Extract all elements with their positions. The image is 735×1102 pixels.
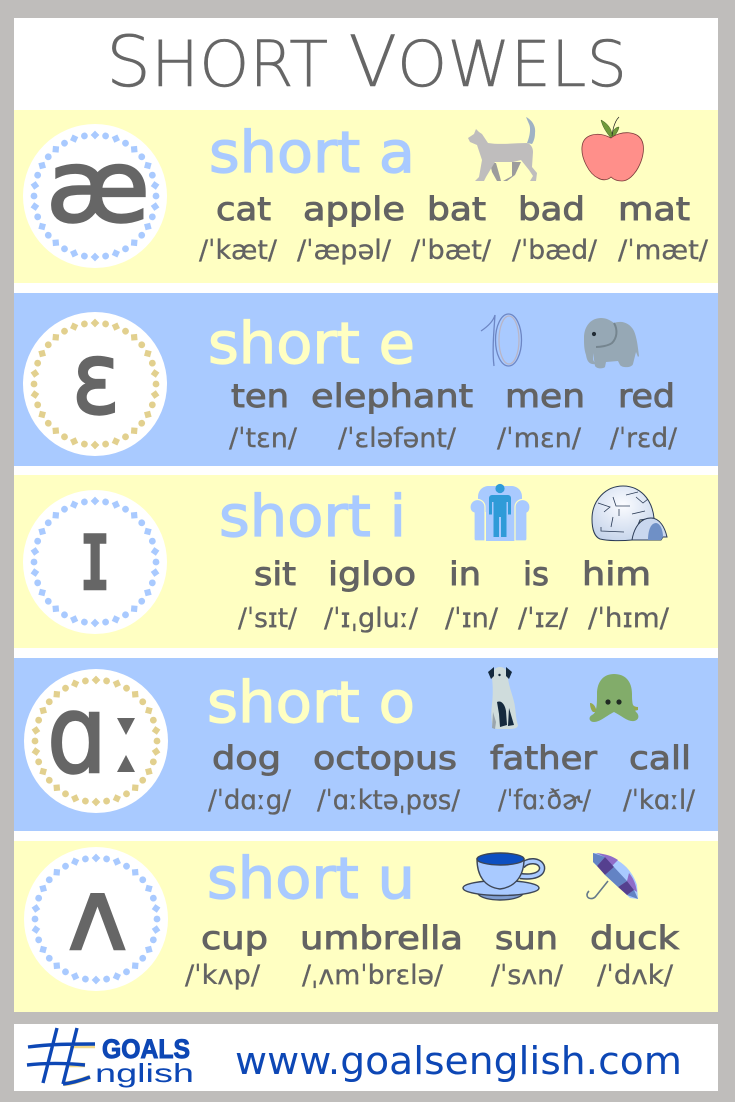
phonetics: short i: /ˈɪˌgluː/ — [324, 603, 419, 634]
phonetics: short e — [229, 423, 678, 454]
heading: short e: short e — [208, 311, 415, 377]
icon: dog — [488, 667, 518, 729]
phonetics: short a: /ˈkæt/ — [199, 235, 278, 266]
phonetics: short o — [208, 785, 696, 816]
phonetics: short a — [199, 235, 709, 266]
words: short o — [212, 739, 691, 777]
words: short o: octopus — [313, 739, 457, 777]
vowel badge: epsilon: ɛ — [72, 320, 120, 437]
words: short i: sit — [254, 555, 296, 593]
heading: short o: short o — [207, 670, 415, 736]
logo: goals english: nglish — [95, 1058, 194, 1088]
words: short e: elephant — [311, 377, 473, 415]
vowel badge: small capital I: ɪ — [80, 496, 110, 613]
footer — [14, 1024, 718, 1091]
vowel badge: small capital I — [23, 490, 167, 634]
panel: short o — [14, 658, 718, 831]
words: short a: cat — [216, 190, 271, 228]
phonetics: short u: /ˈdʌk/ — [597, 960, 674, 991]
words: short a: apple — [303, 190, 405, 228]
phonetics: short e: /ˈrɛd/ — [610, 423, 678, 454]
words: short i: igloo — [328, 555, 416, 593]
words: short e: ten — [231, 377, 289, 415]
phonetics: short e: /ˈtɛn/ — [229, 423, 298, 454]
phonetics: short u: /ˌʌmˈbrɛlə/ — [302, 960, 444, 991]
icon: cat — [468, 117, 537, 181]
words: short a — [216, 190, 690, 228]
heading: short u: short u — [207, 846, 415, 912]
phonetics: short i — [238, 603, 670, 634]
phonetics: short i: /ˈɪz/ — [518, 603, 569, 634]
phonetics: short o: /ˈkɑːl/ — [623, 785, 696, 816]
words: short i — [254, 555, 651, 593]
words: short a: bat — [427, 190, 486, 228]
words: short i: him — [582, 555, 651, 593]
panel: short e — [14, 293, 718, 466]
icon: igloo — [592, 486, 667, 541]
words: short u: sun — [495, 919, 558, 957]
icon: umbrella — [587, 853, 638, 899]
title: SHORT VOWELS — [106, 21, 627, 103]
words: short o: father — [490, 739, 598, 777]
words: short u — [201, 919, 680, 957]
vowel badge: epsilon — [23, 312, 167, 456]
phonetics: short o: /ˈɑːktəˌpʊs/ — [317, 785, 461, 816]
panel: short i — [14, 475, 718, 648]
words: short u: duck — [590, 919, 680, 957]
words: short o: call — [629, 739, 691, 777]
phonetics: short o: /ˈdɑːg/ — [208, 785, 292, 816]
words: short i: in — [449, 555, 481, 593]
vowel badge: caret — [24, 847, 168, 991]
phonetics: short u: /ˈkʌp/ — [185, 960, 261, 991]
heading: short a: short a — [209, 120, 415, 186]
panel: short u — [14, 841, 718, 1012]
phonetics: short e: /ˈmɛn/ — [497, 423, 582, 454]
phonetics: short i: /ˈɪn/ — [445, 603, 499, 634]
logo: goals english — [27, 1028, 194, 1088]
phonetics: short o: /ˈfɑːðɚ/ — [498, 785, 592, 816]
phonetics: short a: /ˈbæt/ — [411, 235, 492, 266]
heading: short i: short i — [219, 484, 406, 550]
icon: elephant — [584, 318, 639, 368]
phonetics: short u — [185, 960, 674, 991]
words: short u: cup — [201, 919, 268, 957]
phonetics: short i: /ˈsɪt/ — [238, 603, 298, 634]
phonetics: short a: /ˈmæt/ — [618, 235, 709, 266]
words: short a: mat — [618, 190, 690, 228]
website url: www.goalsenglish.com — [235, 1039, 682, 1083]
logo: goals english: GOALS — [102, 1034, 190, 1064]
vowel badge: open a long: ɑ — [47, 673, 107, 798]
words: short a: bad — [518, 190, 585, 228]
vowel badge: ae: æ — [46, 128, 150, 245]
panel: short a — [14, 110, 718, 283]
vowel badge: ae — [23, 124, 167, 268]
icon: octopus — [590, 674, 638, 722]
words: short u: umbrella — [300, 919, 463, 957]
icon: apple — [582, 117, 643, 181]
words: short e: men — [505, 377, 585, 415]
vowel badge: open a long — [24, 669, 168, 813]
phonetics: short i: /ˈhɪm/ — [588, 603, 670, 634]
icon: ten — [481, 314, 522, 366]
words: short e — [231, 377, 675, 415]
phonetics: short a: /ˈæpəl/ — [297, 235, 392, 266]
icon: man in armchair — [470, 484, 530, 541]
vowel badge: caret: ʌ — [68, 856, 127, 973]
icon: cup and saucer — [463, 853, 542, 900]
phonetics: short u: /ˈsʌn/ — [491, 960, 564, 991]
words: short o: dog — [212, 739, 281, 777]
words: short i: is — [523, 555, 549, 593]
words: short e: red — [618, 377, 675, 415]
phonetics: short e: /ˈɛləfənt/ — [338, 423, 457, 454]
phonetics: short a: /ˈbæd/ — [512, 235, 598, 266]
